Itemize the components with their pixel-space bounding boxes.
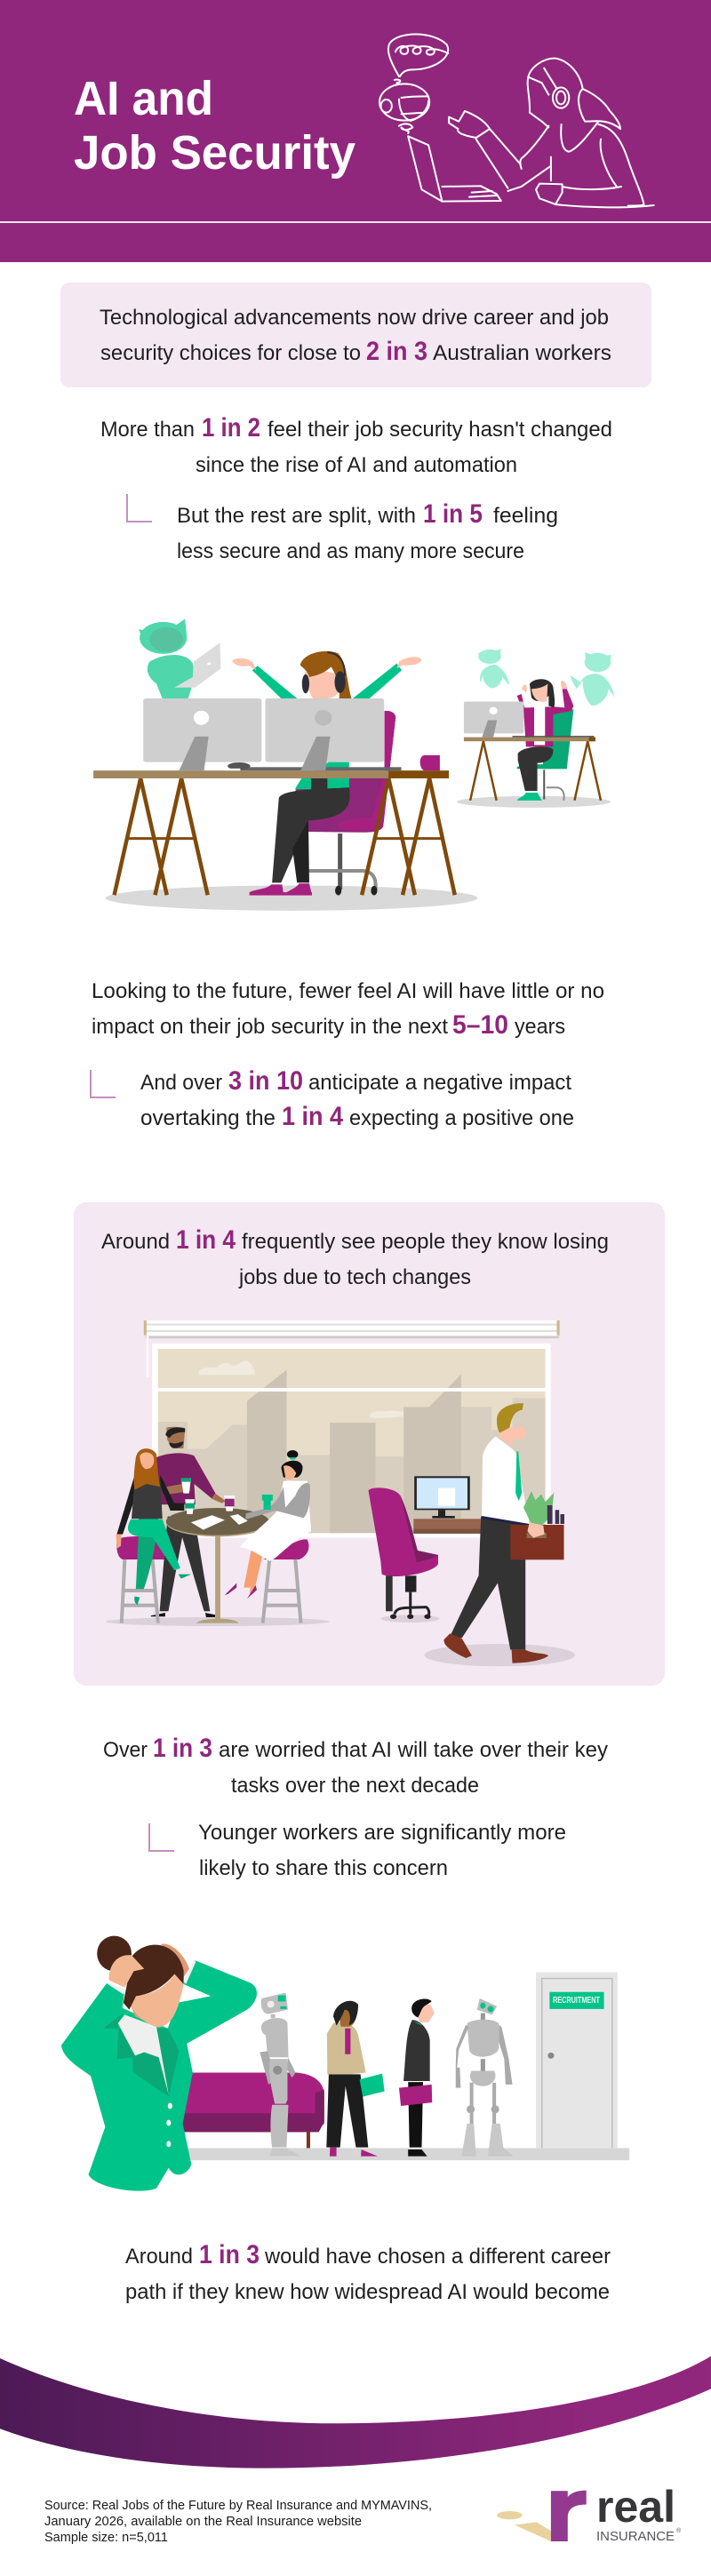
- illustration: worried woman and recruitment queue: [61, 1936, 629, 2191]
- callout: 2 in 3: [60, 283, 651, 387]
- source note: Sample size: n=5,011: [44, 2531, 168, 2545]
- text block: younger workers with bracket: likely to share this concern: [199, 1856, 448, 1880]
- title: [74, 72, 356, 179]
- chair: [277, 711, 395, 896]
- title: Job Security: [74, 126, 356, 179]
- text block: 1 in 3 worried: 1 in 3: [153, 1734, 212, 1763]
- icon: line art of woman talking to robot: [379, 35, 654, 207]
- woman with hair bun: [225, 1450, 311, 1623]
- illustration: woman at desk with AI robot: [93, 618, 614, 911]
- text block: 1 in 2: More than: [100, 418, 195, 442]
- man with folder: [399, 1998, 435, 2157]
- text block: 5-10 years: [92, 979, 604, 1040]
- callout: 2 in 3: Technological advancements now drive career and job: [100, 306, 609, 330]
- text block: 3 in 10 with bracket: And over: [140, 1071, 222, 1095]
- text block: 1 in 3 worried: [103, 1734, 608, 1798]
- source note: January 2026, available on the Real Insurance website: [44, 2515, 362, 2529]
- desk with monitors: [93, 698, 455, 895]
- text block: 5-10 years: impact on their job security in the next: [92, 1015, 448, 1039]
- text block: 3 in 10 with bracket: [91, 1066, 574, 1131]
- desk, monitor and chair: [368, 1476, 483, 1619]
- logo: Real Insurance: INSURANCE: [596, 2529, 675, 2544]
- robot in queue: [260, 1993, 300, 2156]
- logo: Real Insurance: ®: [676, 2527, 682, 2534]
- small scene: woman stressed with robots: [464, 650, 614, 801]
- panel text: Around: [101, 1230, 170, 1254]
- text block: 1 in 3 worried: are worried that AI will take over their key: [219, 1738, 608, 1762]
- text block: 3 in 10 with bracket: 1 in 4: [282, 1102, 343, 1131]
- text block: different career: would have chosen a different career: [264, 2245, 611, 2269]
- door sign text: RECRUITMENT: [553, 1996, 600, 2006]
- callout: 2 in 3: security choices for close to: [100, 341, 361, 365]
- text block: 3 in 10 with bracket: 3 in 10: [228, 1066, 303, 1096]
- source note: Source: Real Jobs of the Future by Real Insurance and MYMAVINS,: [44, 2499, 432, 2513]
- woman body: [250, 762, 350, 896]
- panel text: jobs due to tech changes: [238, 1265, 471, 1289]
- stool left and woman with long hair: [116, 1448, 191, 1623]
- man carrying box: [444, 1403, 564, 1663]
- text block: different career: 1 in 3: [199, 2240, 260, 2269]
- text block: 3 in 10 with bracket: expecting a positive one: [349, 1106, 574, 1130]
- woman arms and head: [232, 651, 421, 698]
- text block: 1 in 5 with bracket: 1 in 5: [423, 499, 483, 529]
- text block: different career: Around: [125, 2245, 193, 2269]
- callout: 2 in 3: 2 in 3: [366, 337, 427, 366]
- humanoid robot: [456, 1998, 514, 2157]
- worried woman in green blazer: [61, 1936, 257, 2191]
- text block: 1 in 2: since the rise of AI and automation: [196, 453, 517, 477]
- floor, door and sofa: [181, 1973, 629, 2160]
- text block: 3 in 10 with bracket: overtaking the: [140, 1106, 276, 1130]
- window and skyline: [152, 1344, 551, 1538]
- header banner: [0, 0, 711, 262]
- title: AI and: [74, 72, 213, 125]
- text block: 1 in 3 worried: tasks over the next decade: [231, 1774, 479, 1798]
- text block: different career: [125, 2240, 611, 2304]
- woman on phone: [326, 2001, 385, 2157]
- text block: 1 in 5 with bracket: less secure and as many more secure: [177, 539, 524, 563]
- panel text: [101, 1225, 609, 1289]
- text block: 5-10 years: Looking to the future, fewer feel AI will have little or no: [92, 979, 604, 1003]
- text block: 1 in 2: 1 in 2: [202, 413, 260, 443]
- robot with laptop: [139, 618, 220, 698]
- text block: 1 in 5 with bracket: [127, 494, 558, 563]
- text block: 1 in 2: [100, 413, 612, 477]
- text block: 1 in 3 worried: Over: [103, 1738, 148, 1762]
- text block: 1 in 5 with bracket: feeling: [493, 504, 558, 528]
- logo: Real Insurance: real: [596, 2482, 675, 2532]
- floor shadows: [106, 1615, 575, 1666]
- text block: 5-10 years: 5–10: [452, 1010, 508, 1040]
- text block: 3 in 10 with bracket: anticipate a negative impact: [308, 1071, 571, 1095]
- text block: 1 in 2: feel their job security hasn't changed: [268, 418, 612, 442]
- roller blind: [144, 1320, 560, 1377]
- source note: [44, 2499, 432, 2545]
- decorative swoosh band: [0, 2357, 711, 2468]
- text block: 5-10 years: years: [515, 1015, 565, 1039]
- text block: different career: path if they knew how widespread AI would become: [125, 2280, 610, 2304]
- text block: younger workers with bracket: [149, 1821, 566, 1880]
- panel: colleagues losing jobs: [74, 1202, 665, 1686]
- panel text: frequently see people they know losing: [242, 1230, 609, 1254]
- illustration: office with window: [106, 1320, 575, 1666]
- round cafe table: [166, 1495, 269, 1623]
- text block: 1 in 5 with bracket: But the rest are split, with: [177, 504, 416, 528]
- logo: Real Insurance: [497, 2482, 682, 2544]
- panel text: 1 in 4: [176, 1225, 236, 1255]
- text block: younger workers with bracket: Younger workers are significantly more: [198, 1821, 566, 1845]
- man with beard: [151, 1427, 226, 1617]
- ground shadows: [106, 796, 611, 911]
- callout: 2 in 3: Australian workers: [433, 341, 611, 365]
